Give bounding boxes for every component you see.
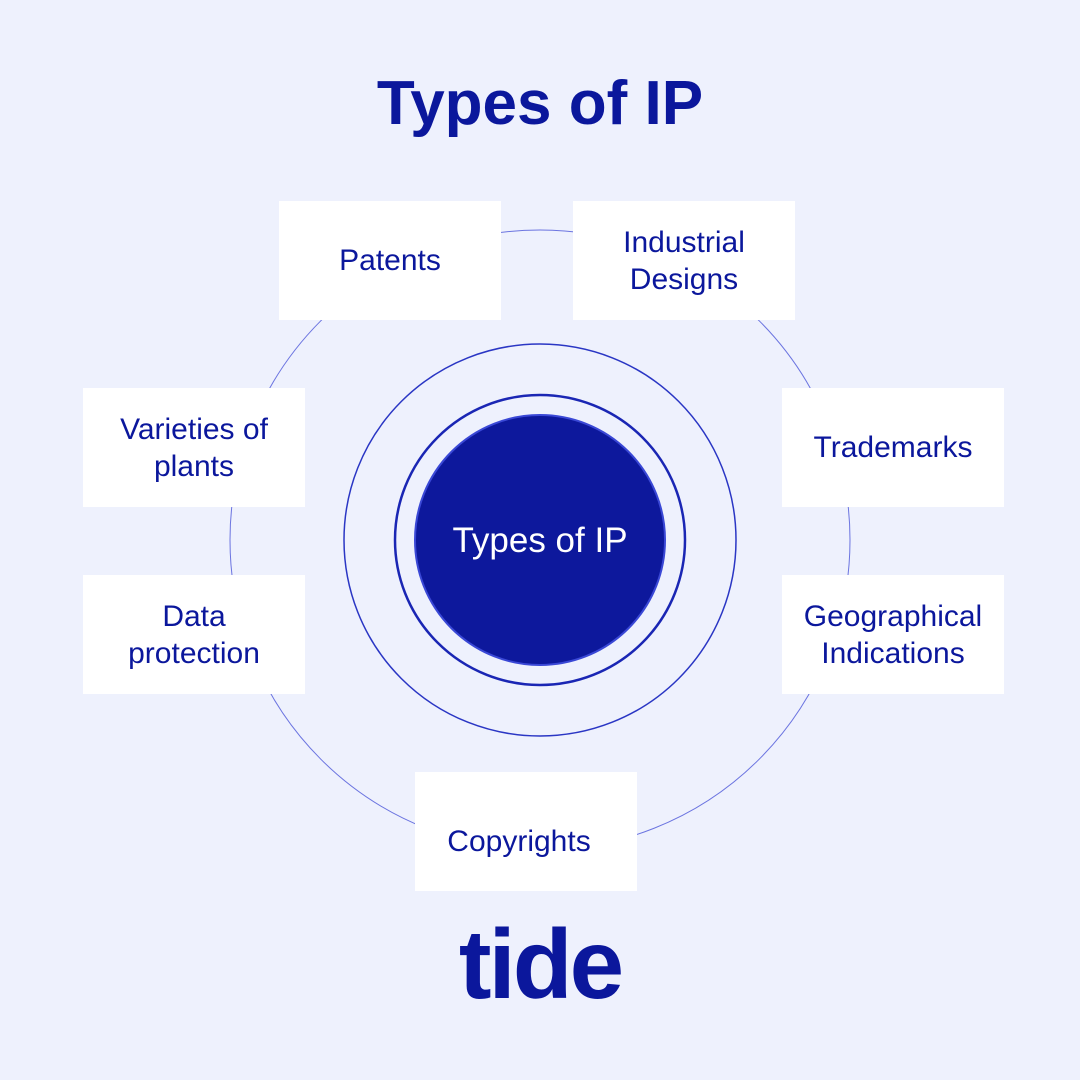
box: Industrial Designs xyxy=(573,201,795,320)
box: Trademarks xyxy=(782,388,1004,507)
box: Industrial Designs: Designs xyxy=(630,262,738,296)
box: Geographical Indications xyxy=(782,575,1004,694)
box: Varieties of plants xyxy=(83,388,305,507)
box: Data protection: protection xyxy=(128,636,260,670)
box: Data protection: Data xyxy=(162,600,226,632)
box: Patents: Patents xyxy=(339,244,441,277)
logo: tide: tide xyxy=(459,909,621,1019)
box: Copyrights: Copyrights xyxy=(447,825,591,858)
box: Trademarks: Trademarks xyxy=(814,431,972,464)
center label: Types of IP xyxy=(452,521,628,560)
box: Copyrights xyxy=(415,772,637,891)
title: Types of IP xyxy=(377,69,703,138)
box: Industrial Designs: Industrial xyxy=(623,226,745,258)
box: Varieties of plants: plants xyxy=(154,450,234,482)
box: Data protection xyxy=(83,575,305,694)
box: Geographical Indications: Geographical xyxy=(804,600,982,632)
box: Varieties of plants: Varieties of xyxy=(120,412,268,446)
box: Patents xyxy=(279,201,501,320)
box: Geographical Indications: Indications xyxy=(821,636,965,670)
